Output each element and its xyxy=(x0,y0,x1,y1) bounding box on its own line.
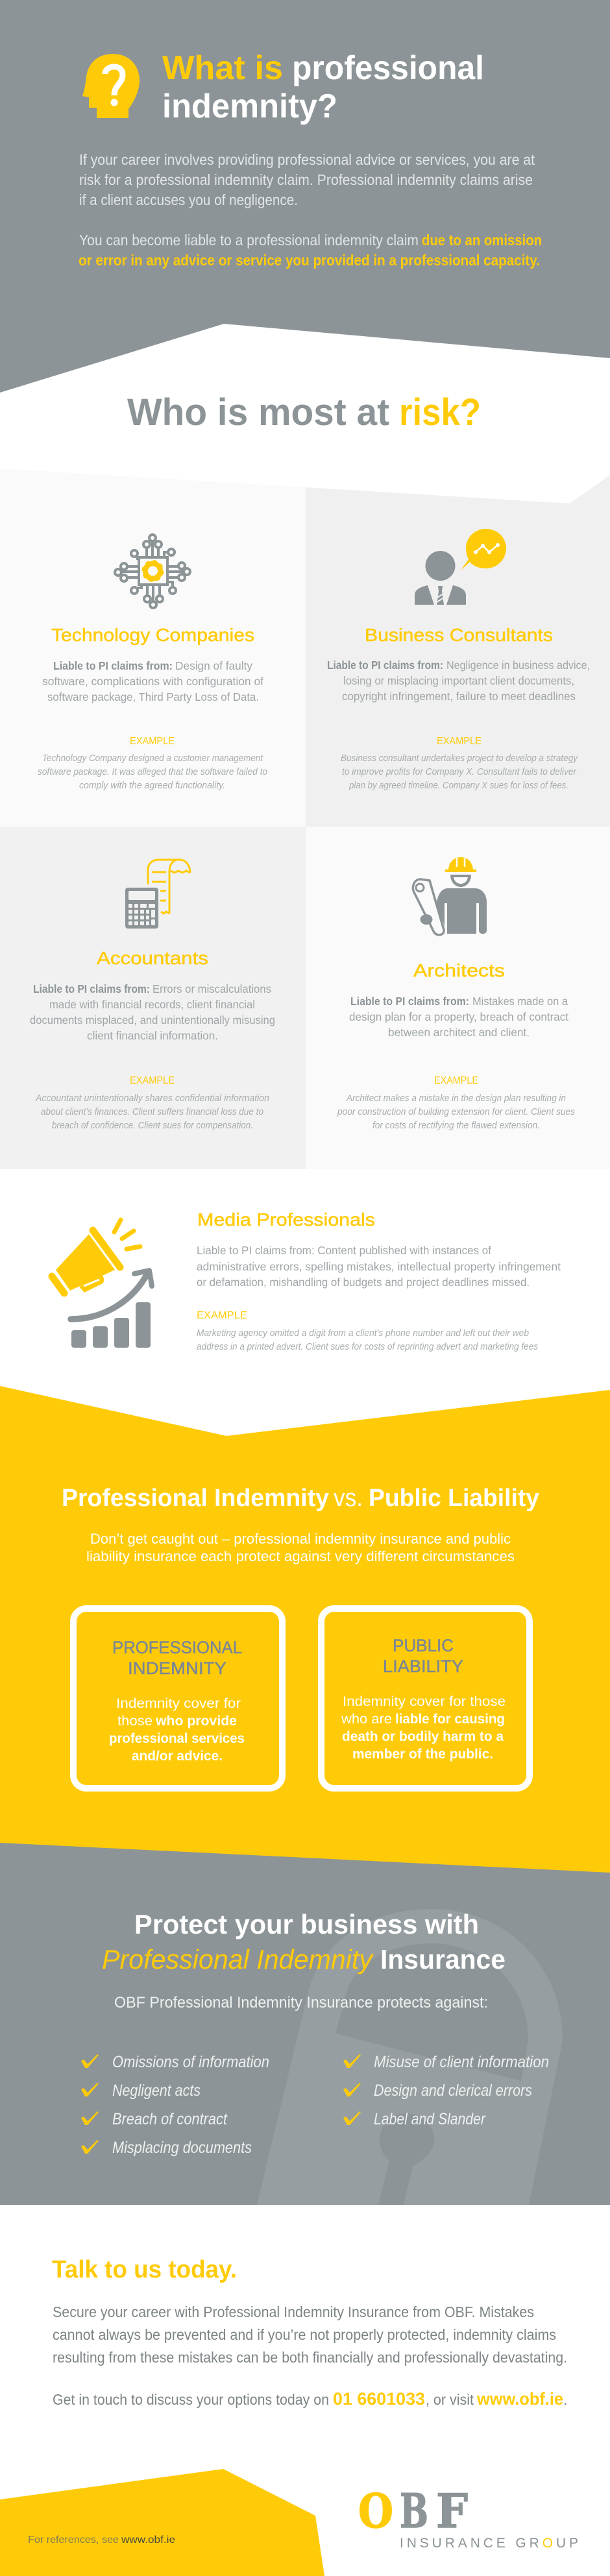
text block: example xyxy=(341,736,578,791)
text block: example xyxy=(337,1075,575,1131)
text block: liability statement: You can become liable to a professional indemnity claim xyxy=(79,232,419,249)
panel: business consultants xyxy=(306,475,610,827)
card: public liability xyxy=(321,1609,530,1788)
card: professional indemnity: and/or advice. xyxy=(132,1749,223,1764)
heading: who is most at risk: risk? xyxy=(399,391,481,433)
text block: liability statement xyxy=(79,232,542,269)
text block: liability: Liable to PI claims from: xyxy=(327,659,443,672)
text block: example: EXAMPLE xyxy=(130,1075,175,1086)
text block: example: Marketing agency omitted a digit from a client’s phone number and left out their web xyxy=(197,1328,529,1339)
heading: comparison: Public Liability xyxy=(369,1485,539,1512)
text block: liability: or defamation, mishandling of budgets and project deadlines missed. xyxy=(197,1276,530,1289)
card: public liability: liable for causing xyxy=(395,1712,505,1727)
heading: business consultants: Business Consultants xyxy=(365,625,553,645)
text block: comparison intro: liability insurance each protect against very different circumstances xyxy=(86,1548,515,1564)
list: covered items: Misplacing documents xyxy=(112,2139,252,2157)
text block: example: Accountant unintentionally shares confidential information xyxy=(35,1093,269,1104)
footer panel: references: www.obf.ie xyxy=(121,2534,175,2546)
text block: example: for costs of rectifying the flawed extension. xyxy=(372,1120,540,1131)
text block: example xyxy=(35,1075,269,1131)
text block: liability: administrative errors, spelling mistakes, intellectual property infringement xyxy=(197,1260,561,1273)
heading: protect your business: Protect your business with xyxy=(134,1909,479,1939)
logo: OBF Insurance Group: B xyxy=(400,2483,428,2538)
text block: intro: If your career involves providing professional advice or services, you are at xyxy=(79,151,535,168)
text block: example: Technology Company designed a customer management xyxy=(42,753,263,764)
title: What is xyxy=(162,49,283,87)
text block: comparison intro: Don’t get caught out – professional indemnity insurance and public xyxy=(90,1531,511,1547)
text block: example: poor construction of building extension for client. Client sues xyxy=(337,1106,575,1117)
text block: example: to improve profits for Company X. Consultant fails to deliver xyxy=(342,766,577,777)
list: covered items: Omissions of information xyxy=(112,2053,269,2071)
text block: intro: risk for a professional indemnity claim. Professional indemnity claims arise xyxy=(79,171,533,188)
card: public liability: death or bodily harm to a xyxy=(342,1729,504,1744)
text block: example: EXAMPLE xyxy=(434,1075,478,1086)
heading: talk to us today: Talk to us today. xyxy=(52,2256,237,2283)
text block: example: Architect makes a mistake in the design plan resulting in xyxy=(346,1093,566,1104)
card: professional indemnity: who provide xyxy=(155,1714,237,1729)
text block: example: software package. It was alleged that the software failed to xyxy=(38,766,267,777)
text block: secure your career: resulting from these mistakes can be both financially and professionally devastating. xyxy=(53,2349,567,2366)
text block: liability: Negligence in business advice, xyxy=(446,659,590,672)
list: covered items: Negligent acts xyxy=(112,2082,201,2100)
title: professional xyxy=(292,49,484,87)
text block: example: Business consultant undertakes project to develop a strategy xyxy=(341,753,578,764)
text block: secure your career xyxy=(53,2303,567,2366)
text block: liability: software, complications with configuration of xyxy=(42,675,263,688)
panel: architects xyxy=(306,827,610,1169)
panel: what is professional indemnity xyxy=(0,0,610,393)
title: indemnity? xyxy=(162,88,337,125)
heading: technology companies: Technology Companies xyxy=(51,625,254,645)
icon: head with question mark xyxy=(82,54,140,118)
text block: liability: client financial information. xyxy=(87,1029,218,1042)
panel: media professionals xyxy=(52,1209,561,1352)
text block: liability: losing or misplacing important client documents, xyxy=(343,674,574,687)
text block: protects against: OBF Professional Indemnity Insurance protects against: xyxy=(114,1994,488,2011)
text block: example: EXAMPLE xyxy=(437,736,482,747)
text block: intro: if a client accuses you of negligence. xyxy=(79,191,298,208)
text block: liability: Errors or miscalculations xyxy=(152,982,271,995)
text block: intro xyxy=(79,151,535,208)
list: covered items xyxy=(81,2053,549,2157)
logo: OBF Insurance Group: O xyxy=(358,2483,393,2538)
text block: liability: Mistakes made on a xyxy=(472,995,568,1008)
heading: who is most at risk: Who is most at xyxy=(127,391,389,433)
text block: example: address in a printed advert. Client sues for costs of reprinting advert and marketing fees xyxy=(197,1341,538,1352)
card: public liability: PUBLIC xyxy=(393,1636,454,1655)
heading: comparison: vs. xyxy=(334,1485,363,1512)
list: covered items: Breach of contract xyxy=(112,2110,228,2128)
text block: example: EXAMPLE xyxy=(130,736,175,747)
heading: comparison xyxy=(62,1485,539,1512)
heading: protect your business: Insurance xyxy=(380,1944,506,1975)
list: covered items: Design and clerical errors xyxy=(374,2082,532,2100)
card: professional indemnity: PROFESSIONAL xyxy=(112,1638,242,1657)
text block: liability statement: due to an omission xyxy=(422,232,542,249)
card: public liability: LIABILITY xyxy=(383,1657,463,1676)
text block: contact details: , or visit xyxy=(426,2391,474,2408)
text block: liability xyxy=(327,659,590,703)
icon: calculator and receipt xyxy=(125,860,190,929)
text block: liability: software package, Third Party Loss of Data. xyxy=(47,690,259,703)
card: professional indemnity xyxy=(73,1609,282,1788)
icon: megaphone and growth chart xyxy=(52,1220,152,1348)
text block: secure your career: cannot always be prevented and if you’re not properly protected, indemnity claims xyxy=(53,2326,556,2343)
text block: liability: documents misplaced, and unintentionally misusing xyxy=(30,1014,275,1027)
heading: accountants: Accountants xyxy=(97,948,208,968)
text block: liability: made with financial records, client financial xyxy=(49,998,255,1011)
text block: example: about client’s finances. Client suffers financial loss due to xyxy=(41,1106,263,1117)
text block: contact details: . xyxy=(563,2391,567,2408)
panel: protect your business xyxy=(0,1843,610,2205)
heading: protect your business: Professional Indemnity xyxy=(102,1944,374,1975)
list: covered items: Misuse of client information xyxy=(374,2053,549,2071)
text block: liability: Liable to PI claims from: xyxy=(350,995,469,1008)
text block: contact details xyxy=(53,2389,567,2409)
footer panel: references: For references, see xyxy=(28,2534,119,2546)
text block: liability: Liable to PI claims from: Content published with instances of xyxy=(197,1244,491,1257)
text block: liability xyxy=(349,995,568,1039)
card: professional indemnity: professional services xyxy=(109,1731,245,1746)
panel: technology companies xyxy=(0,468,306,827)
text block: liability statement: or error in any advice or service you provided in a professional capacity. xyxy=(79,252,540,269)
text block: liability xyxy=(30,982,275,1042)
card: public liability: member of the public. xyxy=(352,1747,493,1762)
card: public liability: who are xyxy=(341,1712,392,1727)
logo: OBF Insurance Group: INSURANCE GROUP xyxy=(400,2536,578,2551)
heading: architects: Architects xyxy=(413,960,505,980)
icon: consultant with speech bubble xyxy=(415,529,506,605)
text block: liability: Design of faulty xyxy=(175,659,252,672)
card: professional indemnity: INDEMNITY xyxy=(128,1659,226,1678)
heading: protect your business xyxy=(102,1909,506,1975)
card: public liability: Indemnity cover for those xyxy=(343,1694,506,1709)
logo: OBF Insurance Group: F xyxy=(436,2483,468,2538)
text block: example: breach of confidence. Client sues for compensation. xyxy=(52,1120,253,1131)
text block: example xyxy=(38,736,267,791)
title xyxy=(162,49,484,125)
panel: professional indemnity vs public liability xyxy=(0,1386,610,1875)
text block: liability: between architect and client. xyxy=(388,1026,530,1039)
card: professional indemnity: those xyxy=(117,1714,152,1729)
text block: contact details: 01 6601033 xyxy=(333,2389,425,2409)
logo: OBF Insurance Group xyxy=(358,2483,578,2551)
heading: media professionals: Media Professionals xyxy=(197,1209,375,1230)
text block: contact details: Get in touch to discuss your options today on xyxy=(53,2391,329,2408)
text block: liability: copyright infringement, failure to meet deadlines xyxy=(342,690,576,703)
text block: secure your career: Secure your career with Professional Indemnity Insurance from OBF. Mistakes xyxy=(53,2303,534,2320)
card: professional indemnity: Indemnity cover for xyxy=(116,1696,241,1711)
text block: example: plan by agreed timeline. Company X sues for loss of fees. xyxy=(348,780,568,791)
text block: liability xyxy=(42,659,263,703)
text block: contact details: www.obf.ie xyxy=(476,2389,563,2409)
heading: comparison: Professional Indemnity xyxy=(62,1485,329,1512)
text block: example: EXAMPLE xyxy=(197,1310,247,1321)
text block: example: comply with the agreed functionality. xyxy=(79,780,225,791)
text block: liability: design plan for a property, breach of contract xyxy=(349,1010,568,1023)
text block: example xyxy=(197,1310,538,1352)
text block: liability xyxy=(197,1244,561,1289)
text block: liability: Liable to PI claims from: xyxy=(53,659,173,672)
icon: architect with hard hat and blueprint xyxy=(413,857,487,935)
text block: comparison intro xyxy=(86,1531,515,1564)
text block: liability: Liable to PI claims from: xyxy=(33,982,150,995)
icon: circuit chip with gear xyxy=(115,535,190,608)
list: covered items: Label and Slander xyxy=(374,2110,486,2128)
panel: accountants xyxy=(0,827,306,1169)
footer panel: references xyxy=(0,2469,324,2576)
icon: padlock watermark xyxy=(257,1909,563,2205)
